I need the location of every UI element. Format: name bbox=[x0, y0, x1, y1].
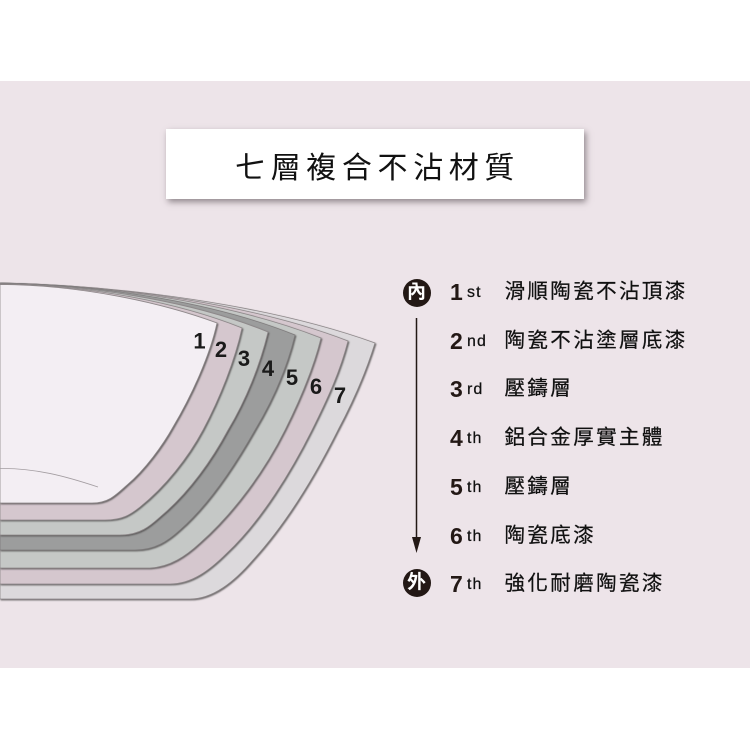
layer 4 bbox=[0, 283, 295, 550]
title: 七層複合不沾材質 bbox=[235, 143, 520, 187]
layer numbers: 3 bbox=[238, 346, 250, 371]
layer 1 bbox=[0, 284, 217, 503]
row 1: 滑順陶瓷不沾頂漆 bbox=[504, 280, 688, 302]
row 3: 壓鑄層 bbox=[504, 376, 573, 400]
row 5: 5 bbox=[450, 474, 463, 500]
row 5 bbox=[450, 474, 573, 500]
layer numbers bbox=[193, 328, 346, 408]
badge: inner: 內 bbox=[407, 282, 426, 303]
row 3: 3 bbox=[450, 376, 463, 402]
row 4 bbox=[450, 424, 665, 450]
row 7: th bbox=[467, 576, 483, 592]
layer numbers: 4 bbox=[262, 356, 275, 381]
row 2: nd bbox=[467, 332, 487, 350]
layer 5 bbox=[0, 283, 321, 568]
row 3 bbox=[450, 376, 573, 402]
row 6 bbox=[450, 522, 596, 548]
layer 7 bbox=[0, 283, 375, 599]
pink background band bbox=[0, 81, 750, 668]
layer numbers: 5 bbox=[286, 365, 298, 390]
row 1 bbox=[450, 278, 688, 304]
title panel bbox=[166, 129, 584, 199]
row 7 bbox=[450, 570, 665, 596]
row 4: 4 bbox=[450, 424, 463, 450]
layer numbers: 6 bbox=[310, 374, 322, 399]
row 7: 7 bbox=[450, 570, 463, 596]
row 6: 6 bbox=[450, 522, 463, 548]
pan inner curve line bbox=[0, 468, 98, 487]
layer numbers: 1 bbox=[193, 328, 206, 354]
row 1: st bbox=[467, 284, 482, 300]
row 2: 2 bbox=[450, 328, 463, 354]
row 4: 鋁合金厚實主體 bbox=[504, 426, 665, 448]
row 6: 陶瓷底漆 bbox=[504, 524, 596, 546]
layer 3 bbox=[0, 284, 268, 535]
badge: inner bbox=[402, 279, 430, 307]
row 6: th bbox=[467, 528, 483, 544]
row 5: th bbox=[467, 478, 483, 496]
layer 2 bbox=[0, 284, 242, 520]
row 3: rd bbox=[467, 380, 483, 398]
row 7: 強化耐磨陶瓷漆 bbox=[504, 572, 665, 594]
badge: outer bbox=[402, 569, 430, 597]
badge: outer: 外 bbox=[407, 572, 426, 593]
row 5: 壓鑄層 bbox=[504, 474, 573, 498]
arrow: inside to outside bbox=[412, 318, 421, 553]
row 2: 陶瓷不沾塗層底漆 bbox=[504, 328, 688, 352]
row 2 bbox=[450, 328, 688, 354]
layer numbers: 7 bbox=[334, 383, 346, 408]
row 4: th bbox=[467, 430, 483, 446]
layer numbers: 2 bbox=[215, 337, 227, 362]
row 1: 1 bbox=[450, 278, 463, 304]
layer 6 bbox=[0, 283, 348, 584]
